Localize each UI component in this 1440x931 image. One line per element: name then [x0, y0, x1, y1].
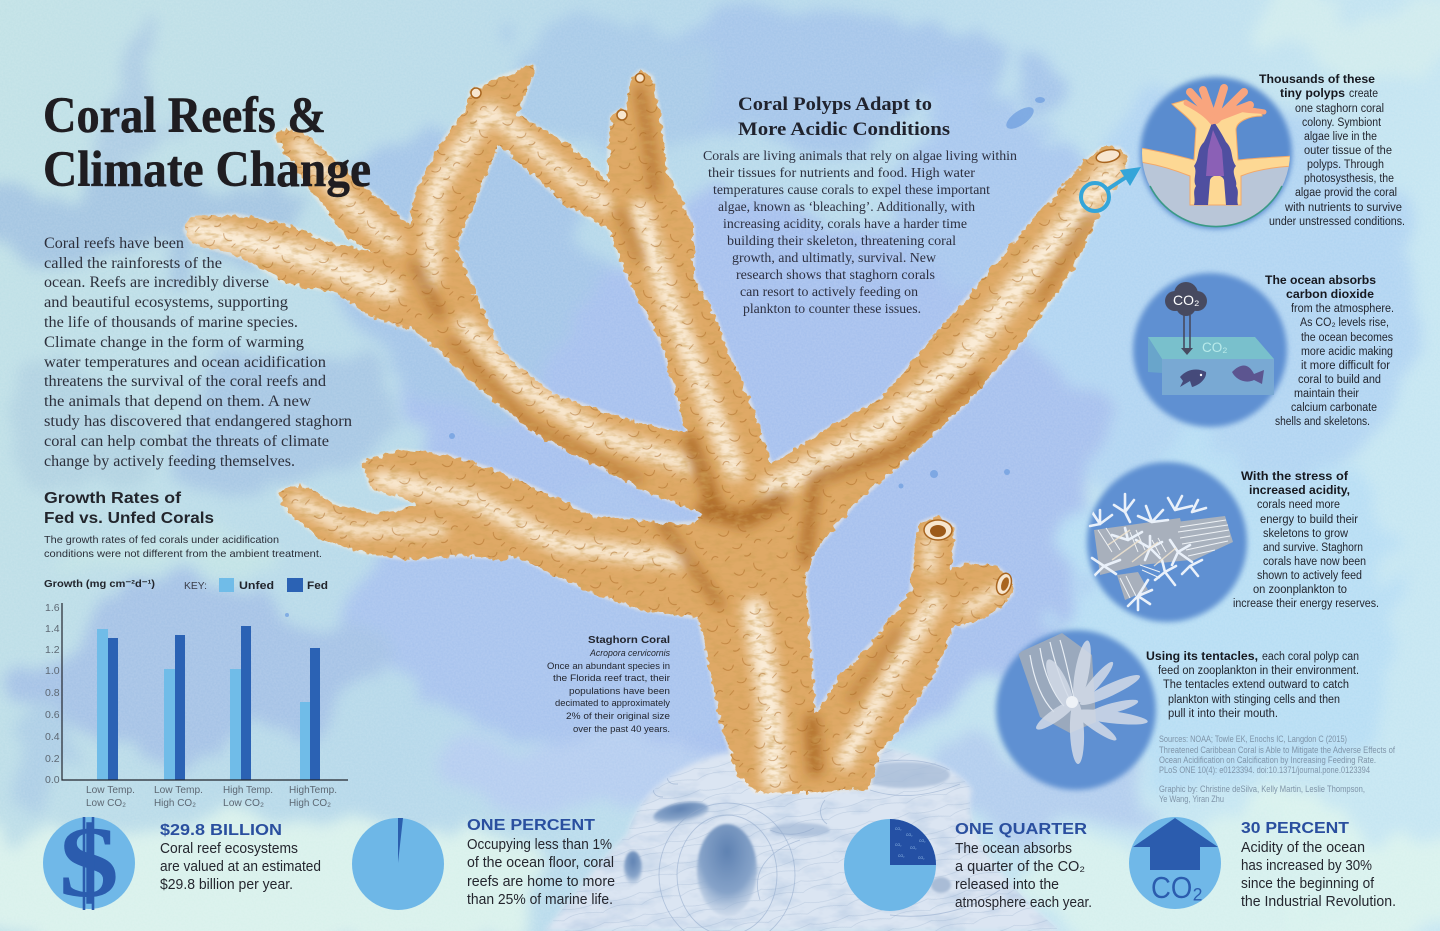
chart heading — [44, 490, 322, 560]
intro paragraph: coral can help combat the threats of climate — [44, 433, 329, 450]
stat icon: one quarter pie: CO₂ — [895, 843, 902, 847]
center paragraph: algae, known as ‘bleaching’. Additionally, with — [718, 199, 975, 214]
staghorn coral illustration — [182, 63, 1130, 795]
center paragraph: can resort to actively feeding on — [740, 284, 918, 299]
text: ocean absorbs CO2: more acidic making — [1301, 346, 1393, 358]
text: polyps: colony. Symbiont — [1302, 117, 1382, 129]
intro paragraph: threatens the survival of the coral reefs and — [44, 373, 326, 390]
chart heading: conditions were not different from the ambient treatment. — [44, 548, 322, 560]
icon: CO2 entering ocean circle — [1133, 273, 1287, 427]
stat icon: one quarter pie: CO₂ — [906, 833, 913, 837]
center paragraph: Corals are living animals that rely on algae living within — [703, 148, 1017, 163]
text: ocean absorbs CO2: shells and skeletons. — [1275, 416, 1370, 428]
text: ocean absorbs CO2: The ocean absorbs — [1265, 275, 1376, 287]
center paragraph: growth, and ultimatly, survival. New — [732, 250, 936, 265]
icon: CO2 entering ocean circle: CO₂ — [1173, 292, 1199, 308]
text: increased acidity: increased acidity, — [1249, 485, 1350, 497]
stat: 29.8 billion: Coral reef ecosystems — [160, 841, 298, 857]
chart heading: Fed vs. Unfed Corals — [44, 510, 214, 527]
sources and credits: Sources: NOAA; Towle EK, Enochs IC, Langdon C (2015) — [1159, 734, 1347, 744]
stat icon: dollar: $ — [59, 806, 119, 919]
text: increased acidity: skeletons to grow — [1263, 528, 1349, 540]
stat icon: CO2 up arrow — [1129, 817, 1221, 909]
sources and credits: Graphic by: Christine deSilva, Kelly Martin, Leslie Thompson, — [1159, 784, 1365, 794]
stat: 29.8 billion: $29.8 BILLION — [160, 822, 282, 839]
text: polyps: algae provid the coral — [1295, 187, 1397, 199]
center paragraph: plankton to counter these issues. — [743, 301, 921, 316]
bar chart: growth rates: 0.4 — [45, 731, 60, 743]
sources and credits: Ocean Acidification on Calcification by Increasing Feeding Rate. — [1159, 755, 1376, 765]
intro paragraph: ocean. Reefs are incredibly diverse — [44, 274, 269, 291]
text: increased acidity: energy to build their — [1260, 514, 1358, 526]
stat: 30 percent — [1241, 820, 1396, 910]
stat: 29.8 billion: $29.8 billion per year. — [160, 877, 293, 893]
staghorn coral caption: populations have been — [569, 686, 670, 697]
chart legend: Growth (mg cm⁻²d⁻¹) — [44, 578, 155, 590]
text: increased acidity: corals have now been — [1263, 556, 1366, 568]
icon: CO2 entering ocean circle: CO₂ — [1202, 340, 1228, 355]
sources and credits: Ye Wang, Yiran Zhu — [1159, 794, 1224, 804]
center heading: More Acidic Conditions — [738, 119, 950, 140]
text: tentacles: plankton with stinging cells and then — [1168, 694, 1340, 706]
bar chart: growth rates: HighTemp. — [289, 784, 337, 796]
staghorn coral caption: the Florida reef tract, their — [553, 673, 671, 684]
text: ocean absorbs CO2: from the atmosphere. — [1291, 303, 1394, 315]
chart legend — [44, 578, 328, 592]
center paragraph: building their skeleton, threatening coral — [727, 233, 956, 248]
intro paragraph: Climate change in the form of warming — [44, 334, 304, 351]
callout arrow from coral to polyp — [1081, 167, 1141, 211]
title — [43, 88, 371, 198]
center heading — [738, 94, 950, 140]
icon: polyp tentacles circle — [996, 630, 1156, 790]
center heading: Coral Polyps Adapt to — [738, 94, 932, 115]
bar chart: growth rates — [45, 602, 348, 809]
text: ocean absorbs CO2: carbon dioxide — [1286, 289, 1374, 301]
text: increased acidity: and survive. Staghorn — [1263, 542, 1363, 554]
stat icon: dollar — [43, 806, 135, 919]
stat: 30 percent: Acidity of the ocean — [1241, 840, 1365, 856]
stat: 29.8 billion: are valued at an estimated — [160, 859, 321, 875]
chart heading: The growth rates of fed corals under acidification — [44, 534, 279, 546]
stat: one quarter: atmosphere each year. — [955, 895, 1092, 911]
stat: one percent — [467, 817, 615, 908]
chart legend: Unfed — [239, 580, 274, 592]
stat icon: one quarter pie: CO₂ — [910, 846, 917, 850]
text: ocean absorbs CO2: it more difficult for — [1301, 360, 1390, 372]
stat icon: one quarter pie: CO₂ — [895, 827, 902, 831]
text: polyps: outer tissue of the — [1304, 145, 1392, 157]
title: Coral Reefs & — [43, 88, 326, 144]
text: tentacles — [1146, 651, 1359, 720]
icon: stressed coral polyps circle — [1087, 462, 1247, 622]
bar chart: growth rates: High Temp. — [223, 784, 273, 796]
bar chart: growth rates: 0.2 — [45, 753, 60, 765]
text: ocean absorbs CO2: As CO₂ levels rise, — [1300, 317, 1389, 329]
stat: one quarter: ONE QUARTER — [955, 821, 1087, 838]
stat icon: one quarter pie: CO₂ — [898, 854, 905, 858]
stat icon: one percent pie — [352, 818, 444, 910]
intro paragraph: the life of thousands of marine species. — [44, 314, 298, 331]
bar chart: growth rates: 1.0 — [45, 665, 60, 677]
sources and credits: Threatened Caribbean Coral is Able to Mitigate the Adverse Effects of — [1159, 745, 1395, 755]
chart legend: KEY: — [184, 580, 207, 592]
intro paragraph: change by actively feeding themselves. — [44, 453, 295, 470]
chart heading: Growth Rates of — [44, 490, 182, 507]
text: ocean absorbs CO2: calcium carbonate — [1291, 402, 1377, 414]
stat: one quarter: The ocean absorbs — [955, 841, 1072, 857]
bar chart: growth rates: 0.8 — [45, 687, 60, 699]
bar chart: growth rates: Low CO₂ — [86, 797, 126, 809]
stat: 29.8 billion — [160, 822, 321, 893]
text: polyps: under unstressed conditions. — [1269, 216, 1405, 228]
bar chart: growth rates: 1.6 — [45, 602, 60, 614]
chart legend: Fed — [307, 580, 328, 592]
stat: one percent: reefs are home to more — [467, 874, 615, 890]
stat: 30 percent: since the beginning of — [1241, 876, 1375, 892]
sources and credits — [1159, 734, 1395, 804]
text: polyps: photosysthesis, the — [1304, 173, 1394, 185]
rock base under the coral — [540, 740, 1070, 931]
stat: one quarter: a quarter of the CO₂ — [955, 859, 1085, 875]
stat: one quarter — [955, 821, 1092, 911]
bar chart: growth rates: 1.4 — [45, 623, 60, 635]
text: increased acidity: corals need more — [1257, 499, 1340, 511]
text: tentacles: pull it into their mouth. — [1168, 708, 1278, 720]
text: increased acidity: on zoonplankton to — [1253, 584, 1347, 596]
intro paragraph — [44, 235, 352, 470]
text: increased acidity: With the stress of — [1241, 471, 1348, 483]
staghorn coral caption: 2% of their original size — [566, 711, 670, 722]
text: tentacles: The tentacles extend outward to catch — [1163, 679, 1349, 691]
stat: one percent: than 25% of marine life. — [467, 892, 613, 908]
bar chart: growth rates: Low CO₂ — [223, 797, 264, 809]
staghorn coral caption: decimated to approximately — [555, 698, 670, 709]
text: ocean absorbs CO2: maintain their — [1294, 388, 1359, 400]
text: polyps: one staghorn coral — [1295, 103, 1384, 115]
bar chart: growth rates: Low Temp. — [154, 784, 203, 796]
intro paragraph: Coral reefs have been — [44, 235, 184, 252]
stat icon: one quarter pie: CO₂ — [919, 839, 926, 843]
bar chart: growth rates: 0.0 — [45, 774, 60, 786]
stat: 30 percent: has increased by 30% — [1241, 858, 1372, 874]
center paragraph: temperatures cause corals to expel these important — [713, 182, 990, 197]
text: polyps: Thousands of these — [1259, 74, 1375, 86]
bar chart: growth rates: 0.6 — [45, 709, 60, 721]
stat: 30 percent: 30 PERCENT — [1241, 820, 1349, 837]
bar chart: growth rates: High CO₂ — [289, 797, 331, 809]
center paragraph — [703, 148, 1017, 316]
text: ocean absorbs CO2: coral to build and — [1298, 374, 1381, 386]
stat icon: CO2 up arrow: CO₂ — [1151, 870, 1203, 905]
intro paragraph: study has discovered that endangered staghorn — [44, 413, 352, 430]
intro paragraph: called the rainforests of the — [44, 255, 222, 272]
icon: polyp cross-section circle — [1140, 77, 1295, 235]
stat: one percent: ONE PERCENT — [467, 817, 595, 834]
staghorn coral caption: over the past 40 years. — [573, 724, 670, 735]
text: polyps — [1259, 74, 1405, 228]
staghorn coral caption — [547, 635, 671, 735]
text: ocean absorbs CO2 — [1265, 275, 1394, 428]
center paragraph: research shows that staghorn corals — [736, 267, 935, 282]
sources and credits: PLoS ONE 10(4): e0123394. doi:10.1371/journal.pone.0123394 — [1159, 765, 1370, 775]
center paragraph: increasing acidity, corals have a harder time — [723, 216, 967, 231]
stat icon: one quarter pie: CO₂ — [918, 856, 925, 860]
stat icon: one quarter pie — [844, 819, 936, 911]
text: increased acidity: increase their energy reserves. — [1233, 598, 1379, 610]
intro paragraph: the animals that depend on them. A new — [44, 393, 312, 410]
staghorn coral caption: Once an abundant species in — [547, 661, 670, 672]
text: tentacles: Using its tentacles, — [1146, 651, 1258, 663]
bar chart: growth rates: 1.2 — [45, 644, 60, 656]
stat: one quarter: released into the — [955, 877, 1059, 893]
center paragraph: their tissues for nutrients and food. High water — [708, 165, 976, 180]
text: polyps: create — [1349, 88, 1378, 100]
text: polyps: with nutrients to survive — [1284, 202, 1402, 214]
text: tentacles: feed on zooplankton in their environment. — [1158, 665, 1359, 677]
bar chart: growth rates: Low Temp. — [86, 784, 135, 796]
staghorn coral caption: Staghorn Coral — [588, 635, 670, 646]
staghorn coral caption: Acropora cervicornis — [589, 648, 670, 659]
text: polyps: tiny polyps — [1280, 88, 1345, 100]
text: ocean absorbs CO2: the ocean becomes — [1301, 332, 1393, 344]
text: polyps: algae live in the — [1304, 131, 1377, 143]
stat: one percent: of the ocean floor, coral — [467, 855, 614, 871]
text: increased acidity: shown to actively feed — [1257, 570, 1362, 582]
title: Climate Change — [43, 142, 371, 198]
stat: 30 percent: the Industrial Revolution. — [1241, 894, 1396, 910]
bar chart: growth rates: High CO₂ — [154, 797, 196, 809]
intro paragraph: water temperatures and ocean acidification — [44, 354, 326, 371]
intro paragraph: and beautiful ecosystems, supporting — [44, 294, 288, 311]
text: polyps: polyps. Through — [1307, 159, 1384, 171]
stat: one percent: Occupying less than 1% — [467, 837, 612, 853]
text: tentacles: each coral polyp can — [1262, 651, 1359, 663]
text: increased acidity — [1233, 471, 1379, 610]
